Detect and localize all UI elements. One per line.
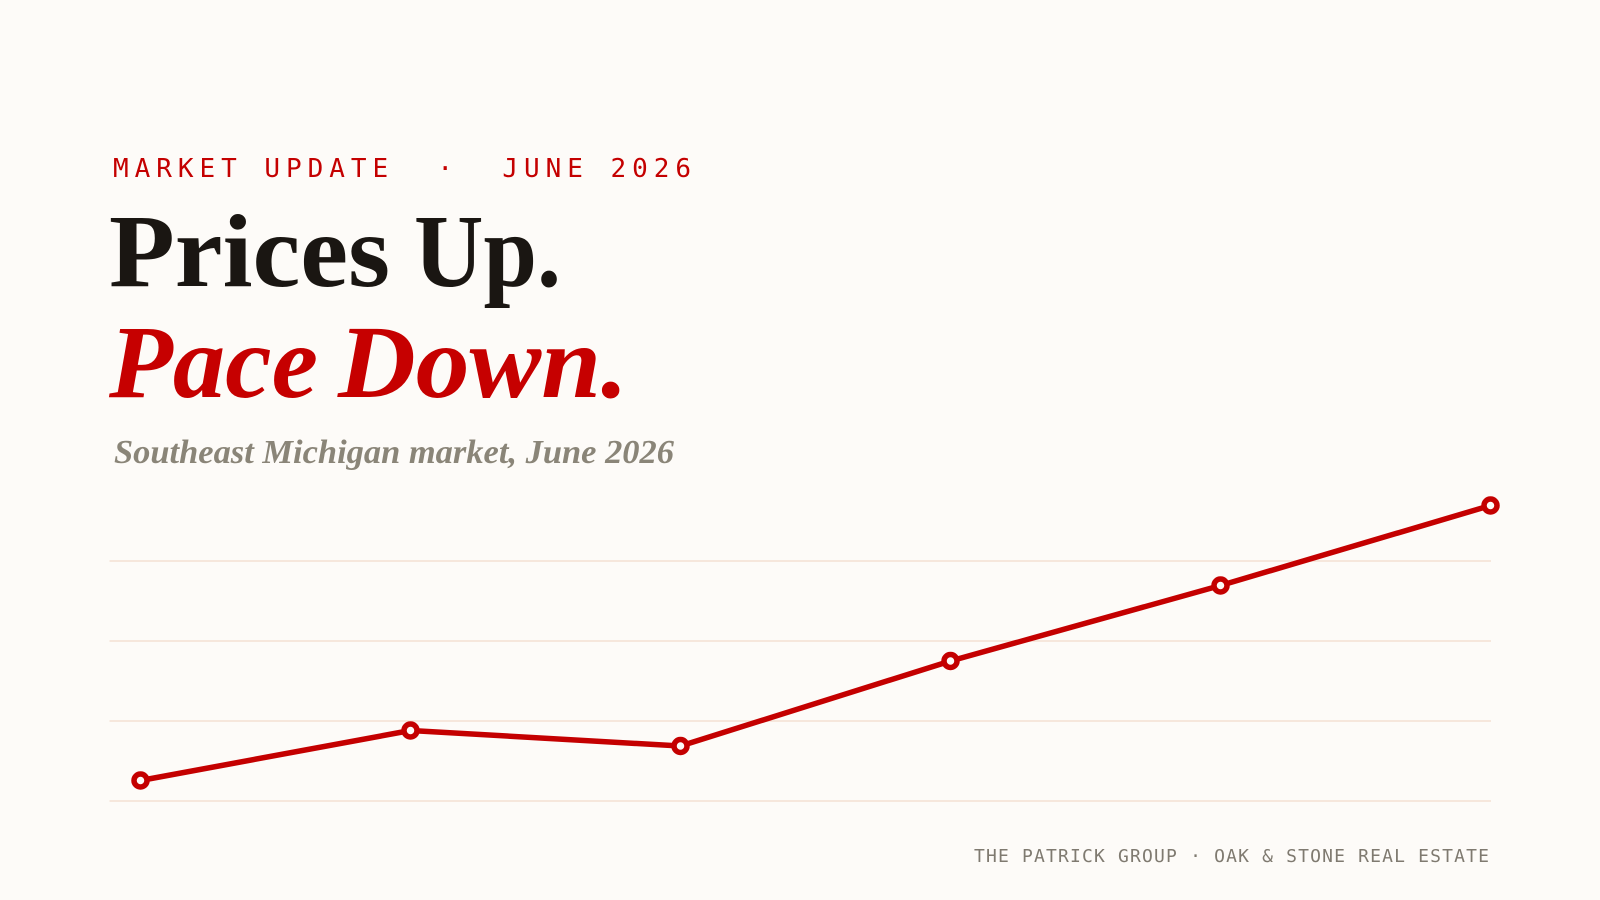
subtitle: Southeast Michigan market, June 2026 (114, 434, 674, 471)
chart grid lines (110, 561, 1491, 801)
footer attribution: THE PATRICK GROUP · OAK & STONE REAL ESTATE (974, 846, 1489, 867)
title line 1: Prices (109, 194, 390, 309)
title line 1 (109, 194, 561, 309)
data point markers (134, 499, 1497, 787)
price trend line (140, 506, 1490, 780)
title line 1: Up. (414, 194, 561, 309)
line chart (110, 499, 1497, 801)
title line 2: Down. (337, 305, 628, 420)
title line 2: Pace (108, 305, 318, 420)
eyebrow label: MARKET UPDATE · JUNE 2026 (113, 154, 691, 184)
title line 2 (108, 305, 628, 420)
